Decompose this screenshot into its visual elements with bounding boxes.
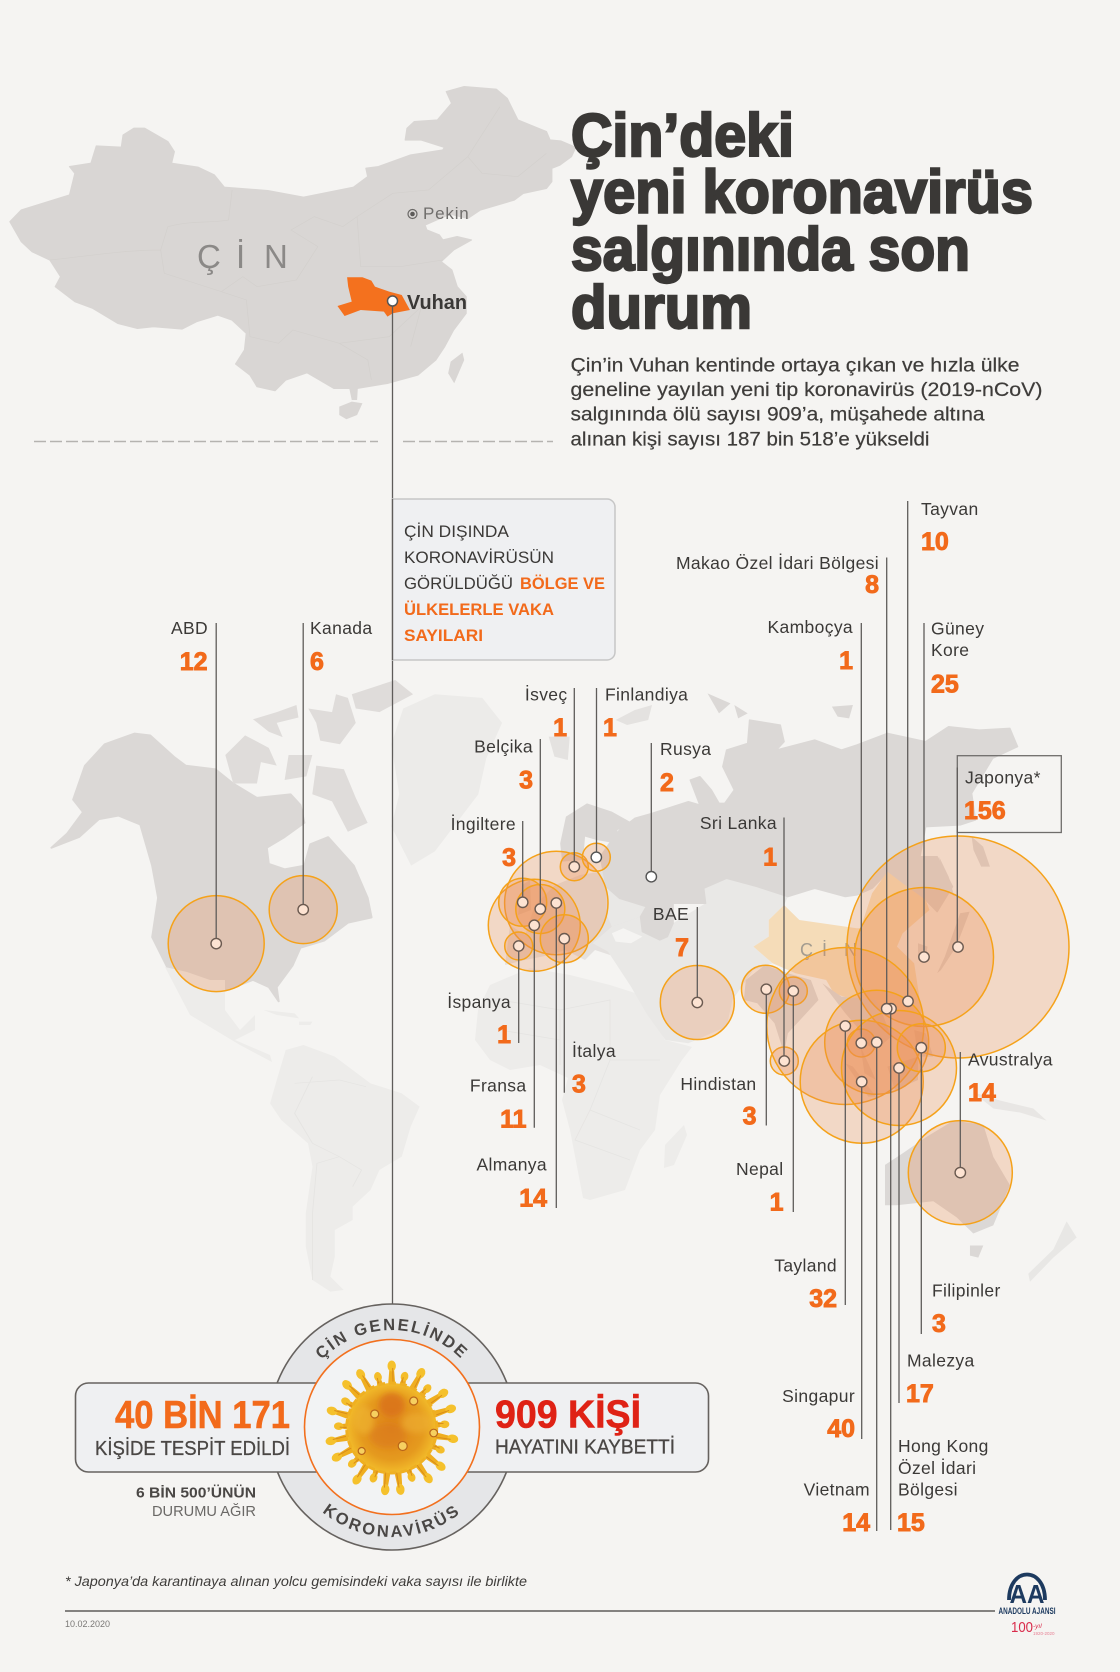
- circle: Kamboçya: [847, 1029, 875, 1057]
- case label: Almanya: 14: [519, 1185, 547, 1213]
- map: China: [10, 87, 576, 419]
- case label: İtalya: 3: [572, 1071, 586, 1099]
- case label: Filipinler: Filipinler: [932, 1280, 1001, 1300]
- case label: Hong Kong: Hong Kong: [898, 1436, 989, 1456]
- connector line: Wuhan to summary badge: [392, 301, 394, 1306]
- case label: Avustralya: [955, 1049, 1053, 1178]
- case label: BAE: [653, 904, 702, 1008]
- circle: Japonya: [847, 836, 1069, 1058]
- circle: İsveç: [560, 853, 588, 881]
- logo: Anadolu Agency: 1920-2020: [1033, 1631, 1055, 1636]
- case label: Singapur: [782, 1076, 867, 1443]
- case label: BAE: BAE: [653, 904, 689, 924]
- case label: Nepal: [736, 986, 798, 1217]
- circle: İngiltere: [499, 878, 547, 926]
- case label: İtalya: [559, 934, 616, 1099]
- case label: Filipinler: [916, 1042, 1001, 1338]
- case label: Güney Kore: 25: [931, 670, 959, 698]
- case label: Hong Kong: 15: [897, 1509, 925, 1537]
- case label: Kamboçya: [768, 617, 866, 1048]
- case label: Tayland: [774, 1021, 850, 1313]
- title: durum: [571, 274, 752, 341]
- case label: Finlandiya: 1: [603, 714, 617, 742]
- case label: İtalya: İtalya: [572, 1041, 616, 1061]
- circle: İtalya: [540, 915, 588, 963]
- case label: Rusya: Rusya: [660, 739, 711, 759]
- case label: İsveç: [525, 685, 580, 872]
- circle: Almanya: [505, 851, 608, 955]
- case label: Tayvan: [903, 499, 979, 1006]
- Europe: [505, 870, 660, 965]
- case label: Kamboçya: Kamboçya: [768, 617, 853, 637]
- severe cases note: [136, 1485, 256, 1520]
- case label: Nepal: Nepal: [736, 1159, 784, 1179]
- dashed divider: [34, 440, 553, 442]
- case label: Japonya: Japonya*: [965, 768, 1041, 788]
- case label: Avustralya: 14: [968, 1079, 996, 1107]
- footer rule: [65, 1610, 995, 1612]
- case label: Tayland: Tayland: [774, 1256, 837, 1276]
- case label: Vietnam: Vietnam: [804, 1480, 870, 1500]
- case label: Fransa: Fransa: [470, 1076, 526, 1096]
- case label: Sri Lanka: Sri Lanka: [700, 813, 777, 833]
- label: China: ÇİN: [197, 238, 288, 275]
- Eurasia: [549, 693, 1018, 1097]
- case label: Vietnam: 14: [842, 1509, 870, 1537]
- callout: map legend: BÖLGE VE: [520, 574, 605, 593]
- summary badge: [74, 1303, 710, 1551]
- circle: Nepal: [779, 977, 807, 1005]
- circle: Fransa: [488, 879, 580, 971]
- case label: Belçika: 3: [519, 767, 533, 795]
- circle: Malezya: [842, 1010, 956, 1126]
- circle: Kanada: [269, 876, 337, 944]
- case label: ABD: 12: [180, 648, 208, 676]
- case label: Hong Kong: Özel İdari: [898, 1458, 976, 1478]
- circle: İspanya: [505, 932, 533, 960]
- case label: Japonya: [953, 756, 1061, 952]
- case label: Kamboçya: 1: [839, 647, 853, 675]
- case label: ABD: [171, 618, 221, 949]
- case label: Vietnam: [804, 1037, 882, 1537]
- intro paragraph: [570, 356, 1042, 450]
- case label: Finlandiya: [591, 685, 688, 862]
- case label: Sri Lanka: [700, 813, 790, 1066]
- callout: map legend: ÜLKELERLE VAKA: [404, 600, 554, 619]
- circle: Tayland: [767, 948, 924, 1104]
- stat: deaths: HAYATINI KAYBETTİ: [495, 1436, 675, 1459]
- case label: Tayland: 32: [809, 1285, 837, 1313]
- province: Hubei: [337, 277, 410, 317]
- case label: Hong Kong: [891, 1012, 989, 1537]
- case label: Makao: 8: [865, 571, 879, 599]
- case label: Hindistan: [680, 984, 772, 1131]
- circle: BAE: [660, 966, 734, 1040]
- case label: Malezya: Malezya: [907, 1351, 975, 1371]
- case label: Tayvan: 10: [921, 528, 949, 556]
- outer ring: [269, 1304, 515, 1550]
- title: [571, 102, 1033, 341]
- circle: Sri Lanka: [770, 1047, 798, 1075]
- case label: Güney Kore: Güney: [931, 618, 984, 638]
- circle: Singapur: [800, 1020, 923, 1143]
- case label: Almanya: [476, 898, 562, 1213]
- case label: Hong Kong: Bölgesi: [898, 1480, 958, 1500]
- case label: Sri Lanka: 1: [763, 844, 777, 872]
- logo: Anadolu Agency: -yıl: [1033, 1623, 1042, 1630]
- case label: Belçika: Belçika: [474, 737, 533, 757]
- case label: Japonya: 156: [964, 797, 1006, 825]
- logo: Anadolu Agency: 100: [1011, 1619, 1033, 1636]
- map label: China on world map: ÇİN: [800, 940, 857, 960]
- case label: Malezya: [894, 1063, 975, 1408]
- stat: deaths: 909 KİŞİ: [495, 1394, 641, 1437]
- callout: map legend: SAYILARI: [404, 626, 483, 645]
- intro paragraph: Çin’in Vuhan kentinde ortaya çıkan ve hızla ülke: [570, 356, 1020, 376]
- logo: Anadolu Agency: AA: [1010, 1579, 1045, 1609]
- case label: İsveç: 1: [553, 714, 567, 742]
- case label: Nepal: 1: [770, 1189, 784, 1217]
- Australia and Oceania: [885, 1092, 1077, 1282]
- case label: İspanya: 1: [497, 1021, 511, 1049]
- case label: Almanya: Almanya: [476, 1155, 547, 1175]
- stat: confirmed cases: 40 BİN 171: [115, 1394, 290, 1437]
- circle: Finlandiya: [582, 843, 610, 871]
- case label: Tayvan: Tayvan: [921, 499, 979, 519]
- Africa: [475, 968, 692, 1200]
- circle: Hindistan: [742, 965, 790, 1013]
- case label: İngiltere: İngiltere: [451, 814, 516, 834]
- dot: Wuhan: [388, 296, 398, 306]
- case label: Fransa: [470, 920, 540, 1134]
- case label: Singapur: 40: [827, 1415, 855, 1443]
- case label: Finlandiya: Finlandiya: [605, 685, 688, 705]
- title: Çin’deki: [571, 102, 794, 169]
- stats panel: [76, 1383, 708, 1472]
- case label: İngiltere: 3: [502, 844, 516, 872]
- circle: Güney Kore: [854, 888, 994, 1026]
- intro paragraph: salgınında ölü sayısı 909’a, müşahede altına: [570, 404, 985, 426]
- circle: ABD: [168, 896, 264, 992]
- inner circle: [304, 1340, 480, 1514]
- case label: ABD: ABD: [171, 618, 208, 638]
- case label: Fransa: 11: [500, 1106, 527, 1134]
- map: world: [51, 680, 1077, 1292]
- case label: Rusya: [646, 739, 711, 882]
- circle: Vietnam: [825, 990, 929, 1094]
- ring text top: ÇİN GENELİNDE: [316, 1318, 468, 1360]
- case label: Hindistan: Hindistan: [680, 1074, 756, 1094]
- case label: Belçika: [474, 737, 546, 914]
- case label: Singapur: Singapur: [782, 1386, 855, 1406]
- stat: confirmed cases: [95, 1394, 290, 1460]
- case label: BAE: 7: [675, 934, 689, 962]
- circle: Avustralya: [908, 1121, 1012, 1225]
- case label: Güney Kore: Kore: [931, 640, 969, 660]
- circle: Belçika: [516, 884, 565, 934]
- severe cases note: 6 BİN 500’ÜNÜN: [136, 1485, 256, 1502]
- callout: map legend: [392, 499, 615, 660]
- stat: confirmed cases: KİŞİDE TESPİT EDİLDİ: [95, 1437, 290, 1460]
- North America: [51, 680, 502, 1001]
- case label: İsveç: İsveç: [525, 685, 568, 705]
- title: yeni koronavirüs: [571, 158, 1033, 226]
- label: Pekin: Pekin: [423, 204, 470, 223]
- label: Vuhan: Vuhan: [407, 292, 467, 314]
- case label: Hindistan: 3: [743, 1103, 756, 1131]
- case label: Makao: [676, 553, 896, 1014]
- case label: Avustralya: Avustralya: [968, 1049, 1053, 1069]
- ring text bottom: KORONAVİRÜS: [323, 1504, 458, 1538]
- date: 10.02.2020: [65, 1619, 110, 1629]
- callout: map legend: ÇİN DIŞINDA: [404, 522, 510, 541]
- case label: Güney Kore: [919, 618, 984, 962]
- case label: Kanada: Kanada: [310, 618, 372, 638]
- intro paragraph: alınan kişi sayısı 187 bin 518’e yükseldi: [570, 430, 930, 450]
- case label: Filipinler: 3: [932, 1310, 946, 1338]
- case label: Rusya: 2: [660, 769, 674, 797]
- case label: Malezya: 17: [906, 1380, 934, 1408]
- case label: İspanya: [447, 941, 524, 1049]
- footnote: * Japonya’da karantinaya alınan yolcu gemisindeki vaka sayısı ile birlikte: [65, 1573, 527, 1589]
- callout: map legend: KORONAVİRÜSÜN: [404, 548, 554, 567]
- circle: Filipinler: [897, 1024, 945, 1072]
- icon: coronavirus: [325, 1360, 459, 1496]
- case label: Kanada: [298, 618, 372, 915]
- proportional case circles: [168, 836, 1069, 1225]
- case label: Kanada: 6: [310, 648, 324, 676]
- case label: İngiltere: [451, 814, 528, 908]
- callout: map legend: GÖRÜLDÜĞÜ: [404, 574, 513, 593]
- South America: [263, 1010, 420, 1292]
- severe cases note: DURUMU AĞIR: [152, 1503, 256, 1520]
- Mexico and Central America: [165, 967, 272, 1062]
- intro paragraph: geneline yayılan yeni tip koronavirüs (2019-nCoV): [570, 380, 1042, 401]
- case label: İspanya: İspanya: [447, 992, 511, 1012]
- logo: Anadolu Agency: ANADOLU AJANSI: [998, 1606, 1056, 1617]
- stat: deaths: [495, 1394, 675, 1459]
- logo: Anadolu Agency: [998, 1574, 1056, 1636]
- title: salgınında son: [571, 216, 970, 283]
- case label: Makao: Makao Özel İdari Bölgesi: [676, 553, 879, 573]
